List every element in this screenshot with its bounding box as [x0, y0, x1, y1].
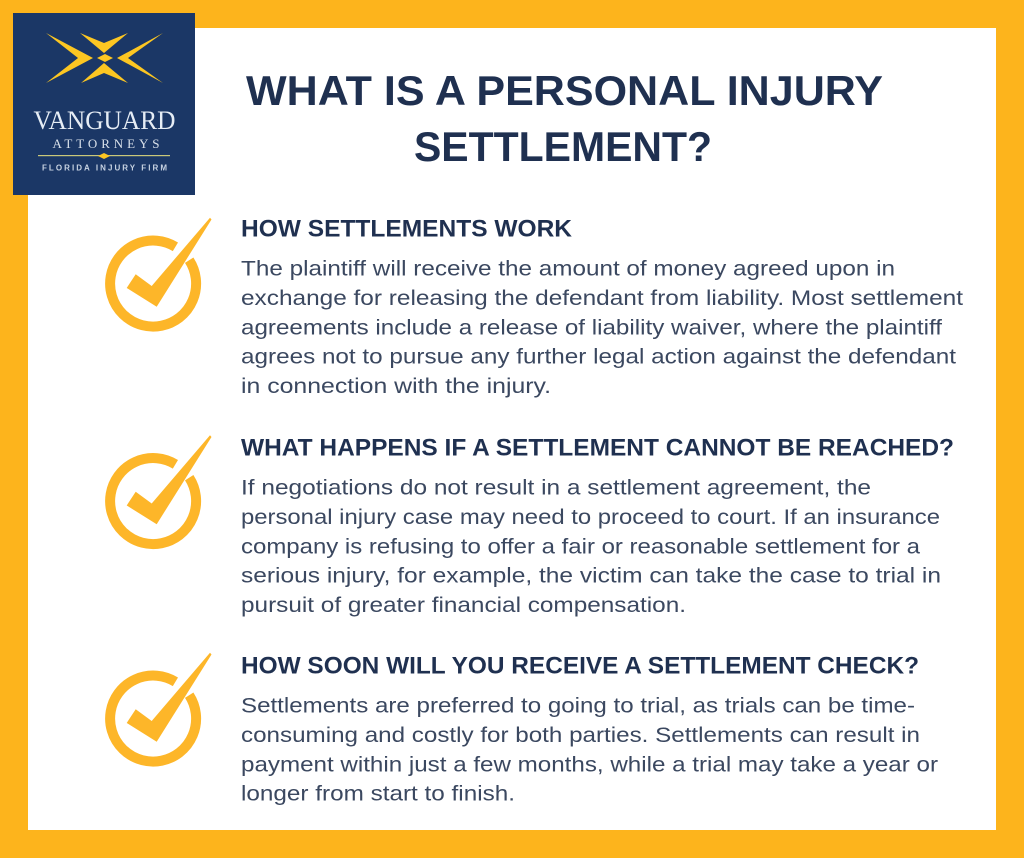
logo	[13, 13, 195, 195]
heading: HOW SOON WILL YOU RECEIVE A SETTLEMENT CHECK?	[241, 652, 919, 680]
body text: agreements include a release of liability waiver, where the plaintiff	[241, 316, 942, 340]
body text: company is refusing to offer a fair or reasonable settlement for a	[241, 534, 920, 558]
logo subtitle: ATTORNEYS	[52, 136, 160, 151]
icon: check 1	[110, 218, 212, 327]
heading: HOW SETTLEMENTS WORK	[241, 216, 573, 242]
body text: serious injury, for example, the victim can take the case to trial in	[241, 564, 941, 588]
icon: check 3	[110, 653, 212, 762]
body text	[241, 256, 963, 398]
body text: If negotiations do not result in a settlement agreement, the	[241, 476, 871, 500]
logo tagline: FLORIDA INJURY FIRM	[42, 164, 167, 172]
body text: consuming and costly for both parties. Settlements can result in	[241, 723, 920, 747]
icon: logo star	[46, 33, 163, 83]
body text: pursuit of greater financial compensation.	[241, 593, 686, 617]
body text: agrees not to pursue any further legal action against the defendant	[241, 344, 956, 368]
body text: personal injury case may need to proceed to court. If an insurance	[241, 505, 940, 529]
body text: in connection with the injury.	[241, 374, 551, 398]
title: WHAT IS A PERSONAL INJURY	[246, 67, 883, 114]
body text	[241, 476, 941, 617]
section: settlement cannot be reached	[241, 434, 954, 617]
icon: check 2	[110, 435, 212, 544]
body text: exchange for releasing the defendant from liability. Most settlement	[241, 286, 963, 310]
title: SETTLEMENT?	[414, 123, 712, 170]
section: how settlements work	[241, 216, 963, 398]
body text: Settlements are preferred to going to trial, as trials can be time-	[241, 694, 915, 718]
logo wordmark: VANGUARD	[34, 106, 176, 135]
body text	[241, 694, 938, 806]
body text: longer from start to finish.	[241, 782, 515, 806]
body text: The plaintiff will receive the amount of money agreed upon in	[241, 256, 895, 280]
body text: payment within just a few months, while a trial may take a year or	[241, 752, 938, 776]
logo divider	[38, 153, 170, 159]
section: settlement check timing	[241, 652, 938, 806]
heading: WHAT HAPPENS IF A SETTLEMENT CANNOT BE REACHED?	[241, 434, 954, 462]
title	[246, 67, 883, 170]
